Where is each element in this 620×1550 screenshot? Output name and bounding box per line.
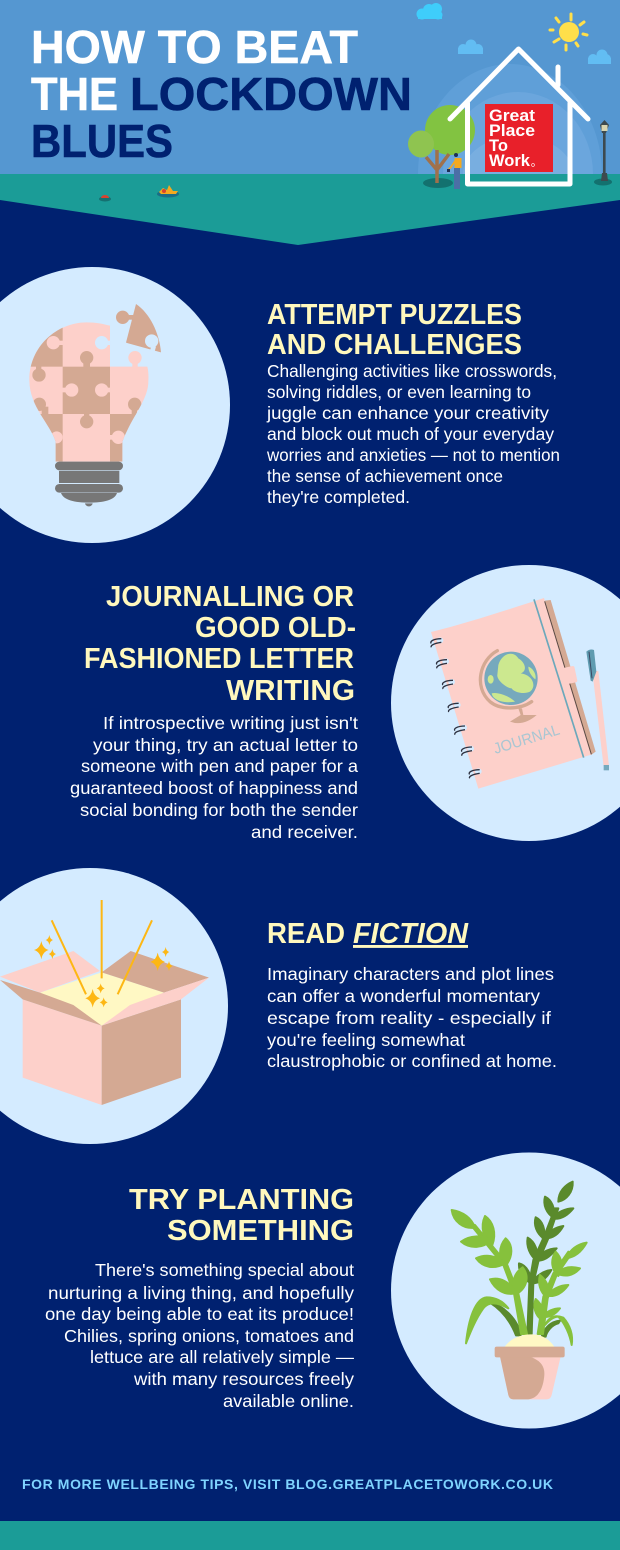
text: planting body: with many resources freely xyxy=(133,1369,354,1389)
text: puzzles body: they're completed. xyxy=(267,487,410,507)
text: journalling body: and receiver. xyxy=(251,822,358,842)
title: BLUES xyxy=(31,115,173,167)
heading: journalling: JOURNALLING OR xyxy=(106,581,354,613)
globe xyxy=(480,651,538,723)
footer link text: FOR MORE WELLBEING TIPS, VISIT BLOG.GREATPLACETOWORK.CO.UK xyxy=(22,1476,553,1492)
icon: journal and pen xyxy=(431,598,609,789)
text: puzzles body xyxy=(266,361,560,507)
logo: Great Place To Work: Place xyxy=(489,122,535,140)
text: planting body: lettuce are all relatively simple — xyxy=(90,1347,355,1367)
text: journalling body: someone with pen and paper for a xyxy=(81,756,358,776)
icon: tree xyxy=(408,105,475,188)
icon: open box with sparkles xyxy=(0,900,209,1105)
heading: attempt puzzles xyxy=(267,299,522,361)
panel: read fiction xyxy=(0,868,557,1144)
text: planting body: nurturing a living thing, and hopefully xyxy=(48,1283,354,1303)
circle: read fiction xyxy=(0,868,228,1144)
heading: journalling: GOOD OLD- xyxy=(195,612,356,644)
text: journalling body xyxy=(70,713,358,842)
heading: attempt puzzles: AND CHALLENGES xyxy=(267,329,522,361)
logo: Great Place To Work: Work xyxy=(489,152,531,170)
text: fiction body: you're feeling somewhat xyxy=(267,1030,465,1050)
title xyxy=(31,21,412,167)
text: planting body: available online. xyxy=(223,1391,354,1411)
text: puzzles body: juggle can enhance your creativity xyxy=(266,403,549,423)
text: puzzles body: the sense of achievement once xyxy=(267,466,503,486)
heading: try planting xyxy=(129,1184,354,1247)
house halo xyxy=(418,64,602,174)
icon: journal and pen: JOURNAL xyxy=(492,721,562,758)
panel: planting xyxy=(45,1152,620,1428)
icon: house outline xyxy=(450,49,588,184)
icon: person watering xyxy=(447,153,462,189)
text: puzzles body: worries and anxieties — not to mention xyxy=(266,445,560,465)
icon: sun xyxy=(550,14,587,50)
logo: Great Place To Work: To xyxy=(489,137,508,155)
title: LOCKDOWN xyxy=(130,68,412,120)
heading: journalling: WRITING xyxy=(226,675,355,707)
panel: header scene xyxy=(0,0,620,245)
heading: read fiction: READ xyxy=(267,918,345,950)
text: fiction body xyxy=(267,964,557,1071)
heading: try planting: SOMETHING xyxy=(167,1215,354,1247)
icon: potted plant xyxy=(452,1182,587,1399)
title: HOW TO BEAT xyxy=(31,21,358,73)
panel: journalling xyxy=(70,565,620,842)
icon: puzzle light bulb xyxy=(20,304,161,506)
heading: attempt puzzles: ATTEMPT PUZZLES xyxy=(267,299,522,331)
text: fiction body: claustrophobic or confined at home. xyxy=(267,1051,557,1071)
footer band xyxy=(0,1521,620,1550)
icon: mounds on ground xyxy=(99,185,179,202)
text: journalling body: social bonding for both the sender xyxy=(80,800,358,820)
title: THE xyxy=(31,68,118,120)
text: planting body: one day being able to eat its produce! xyxy=(45,1304,354,1324)
text: puzzles body: and block out much of your everyday xyxy=(267,424,554,444)
text: journalling body: guaranteed boost of happiness and xyxy=(70,778,358,798)
logo: Great Place To Work: Great xyxy=(489,107,536,125)
circle: puzzles xyxy=(0,267,230,543)
panel: puzzles xyxy=(0,267,560,543)
text: fiction body: can offer a wonderful momentary xyxy=(267,986,540,1006)
heading: read fiction xyxy=(267,918,469,950)
pen xyxy=(586,649,609,770)
text: journalling body: your thing, try an actual letter to xyxy=(93,735,358,755)
text: planting body: There's something special about xyxy=(95,1260,354,1280)
text: puzzles body: Challenging activities like crosswords, xyxy=(267,361,557,381)
circle: planting xyxy=(391,1152,620,1428)
heading: journalling xyxy=(84,581,356,707)
heading: journalling: FASHIONED LETTER xyxy=(84,643,354,675)
text: journalling body: If introspective writing just isn't xyxy=(103,713,358,733)
spiral rings xyxy=(431,637,482,778)
text: planting body: Chilies, spring onions, tomatoes and xyxy=(64,1326,354,1346)
text: fiction body: escape from reality - especially if xyxy=(267,1008,551,1028)
circle: journalling xyxy=(391,565,620,841)
text: planting body xyxy=(45,1260,355,1411)
heading: read fiction: FICTION xyxy=(353,918,469,950)
logo: Great Place To Work xyxy=(485,104,553,172)
text: puzzles body: solving riddles, or even learning to xyxy=(267,382,531,402)
icon: clouds xyxy=(416,3,611,64)
text: fiction body: Imaginary characters and plot lines xyxy=(267,964,554,984)
heading: try planting: TRY PLANTING xyxy=(129,1184,354,1216)
icon: lamp post xyxy=(594,120,612,186)
